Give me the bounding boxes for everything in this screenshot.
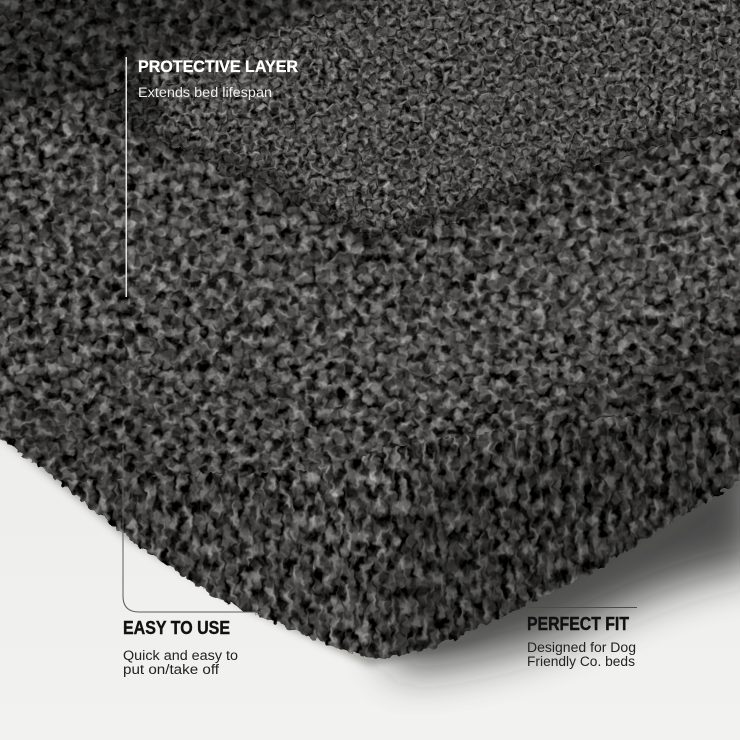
inner fold shadow — [100, 66, 165, 130]
right wall shade — [380, 320, 740, 680]
floor shadow around bed — [380, 440, 740, 670]
leader line — [123, 445, 270, 612]
heading: PERFECT FIT — [527, 614, 629, 634]
callout: easy to use: put on/take off — [123, 662, 219, 677]
callout: protective layer — [126, 57, 298, 297]
chenille texture: cushion — [100, 0, 740, 238]
callout: perfect fit: Friendly Co. beds — [527, 654, 635, 669]
back bolster shadow — [0, 0, 430, 110]
leader line — [527, 607, 637, 608]
description: Quick and easy to — [123, 648, 238, 663]
chenille texture: side wall — [59, 402, 740, 659]
cushion crease — [130, 115, 740, 240]
description: Designed for Dog — [527, 640, 636, 655]
heading: PROTECTIVE LAYER — [138, 57, 298, 76]
callout: perfect fit — [527, 607, 637, 669]
heading: EASY TO USE — [123, 618, 230, 638]
left wall shade — [0, 350, 370, 670]
corner seam — [335, 440, 372, 590]
callout: easy to use — [123, 445, 270, 677]
ridge highlight — [40, 160, 740, 390]
leader line — [126, 57, 127, 297]
description: Extends bed lifespan — [138, 85, 272, 100]
